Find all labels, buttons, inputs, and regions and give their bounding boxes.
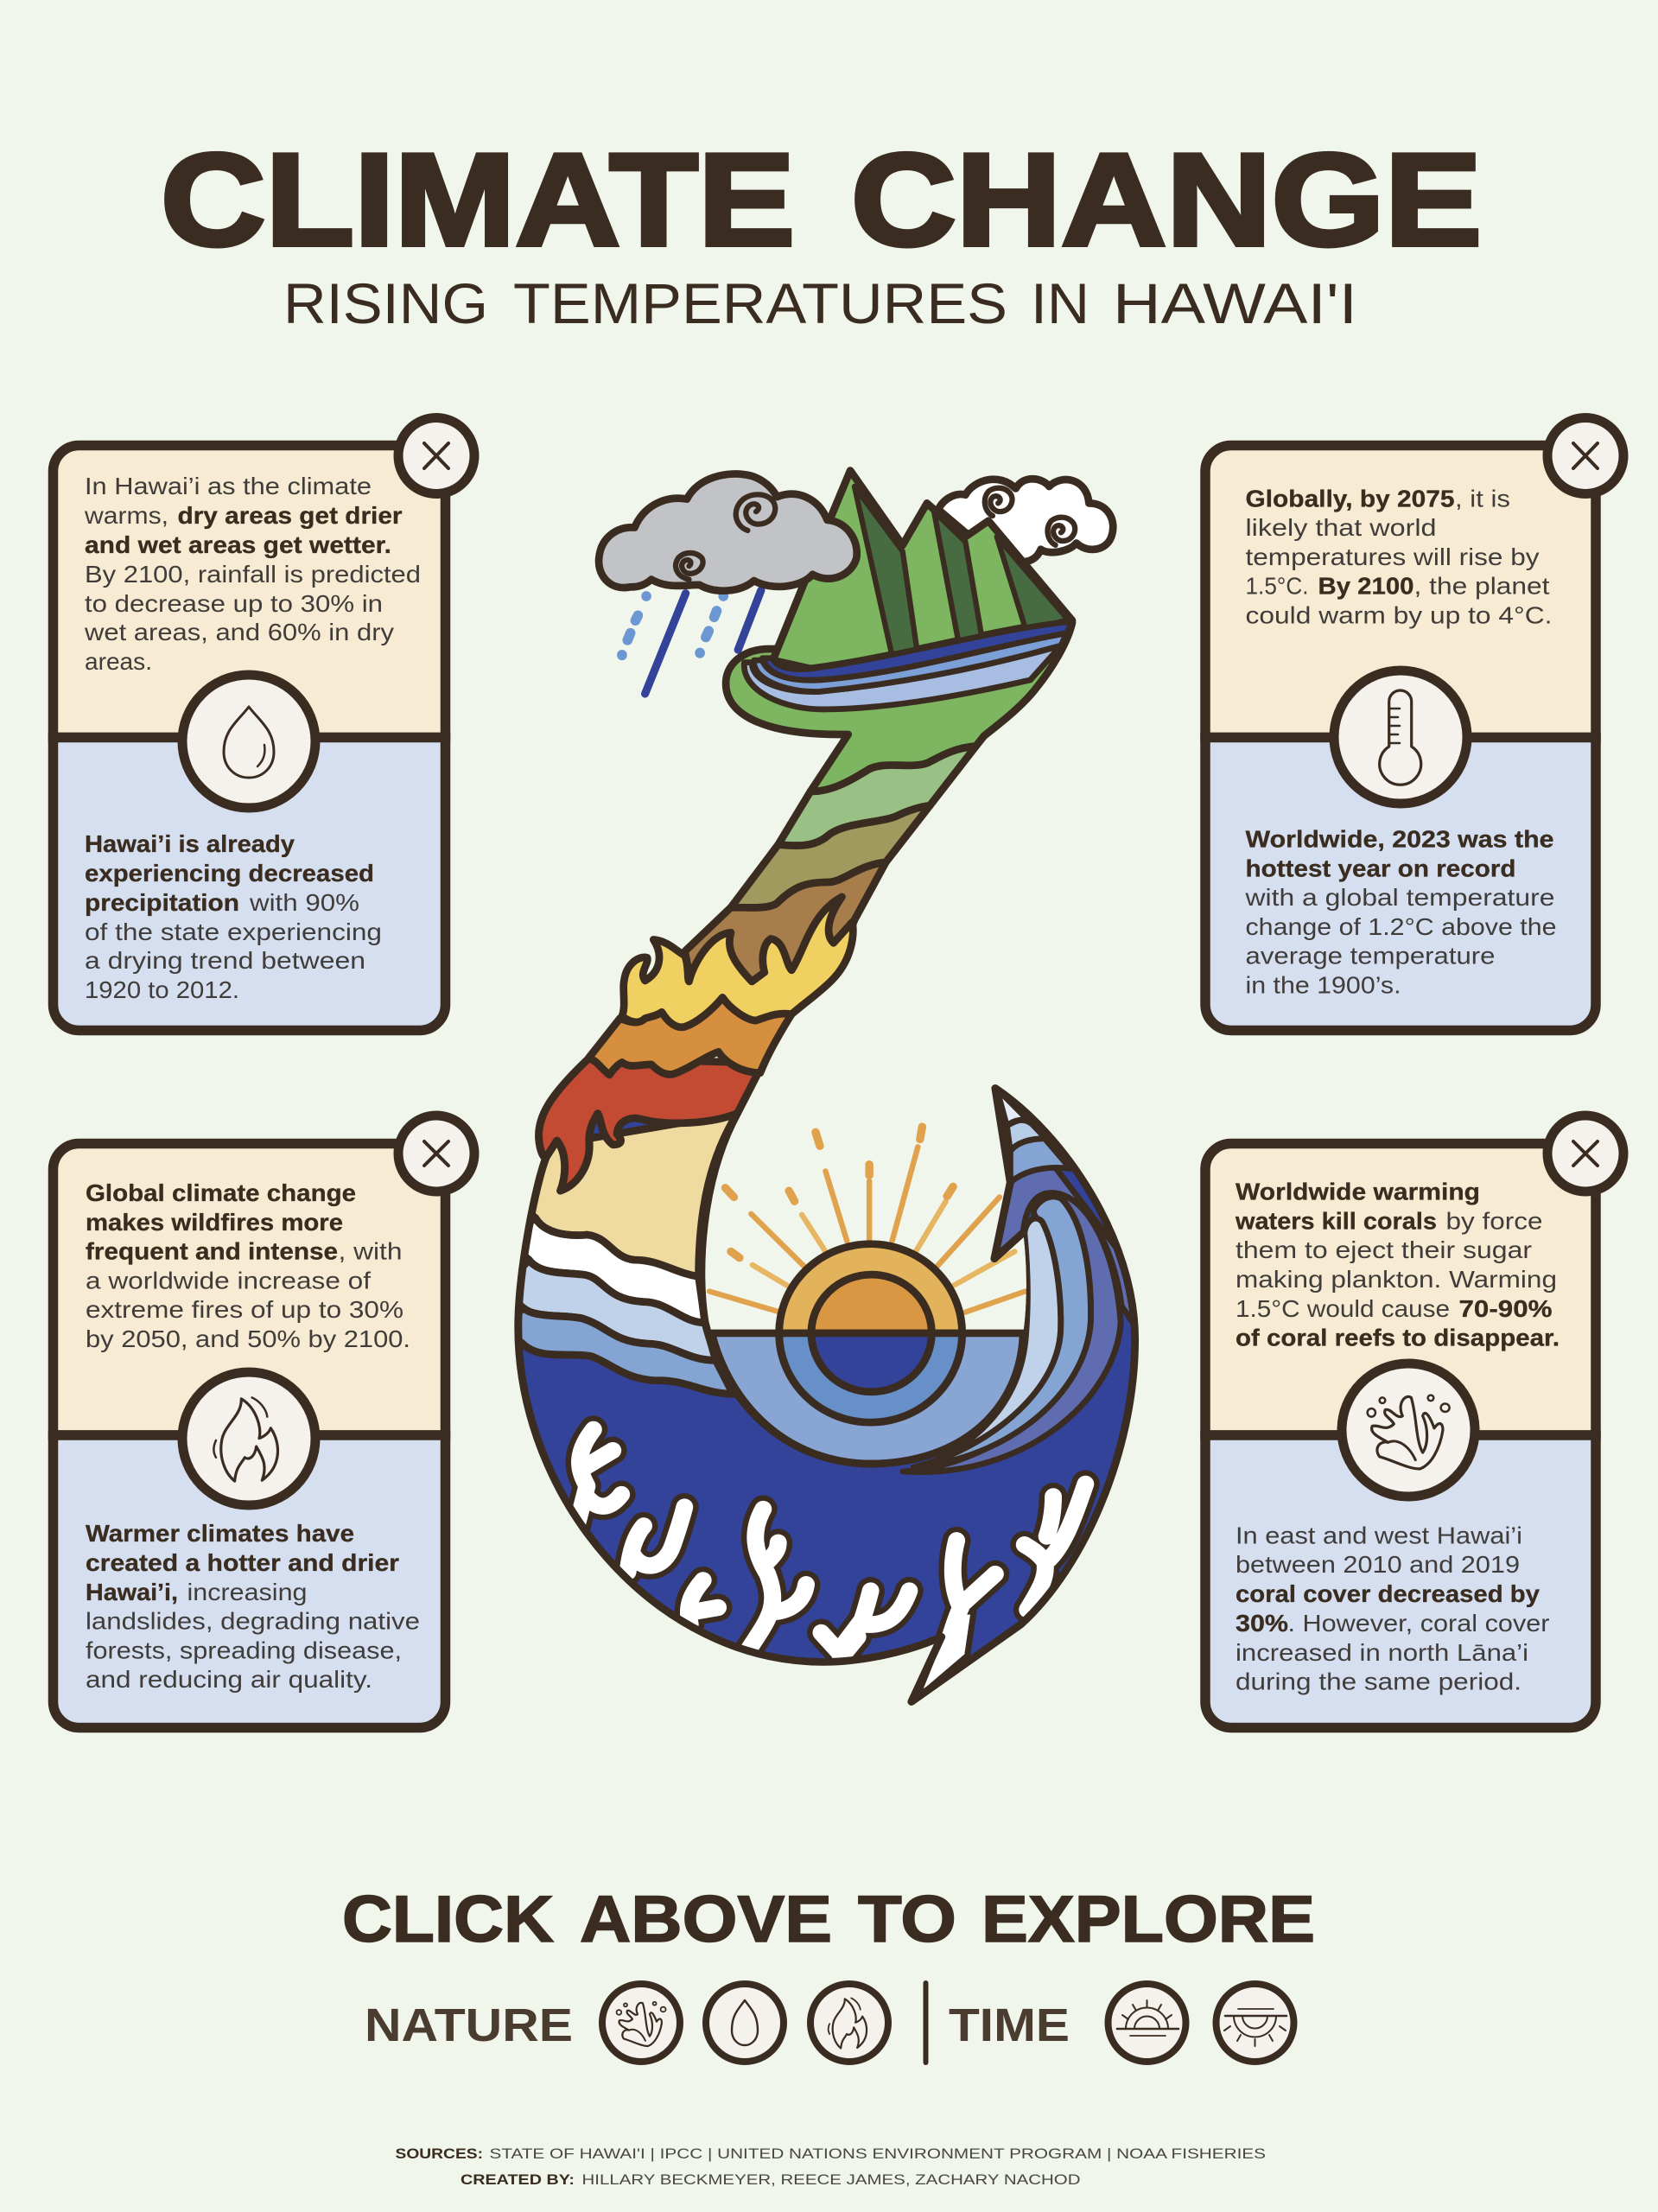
horizon water [712, 1333, 1025, 1464]
precipitation trend text: experiencing decreased [85, 860, 374, 887]
mountains [772, 471, 1072, 669]
icon: sunrise button [1108, 1984, 1185, 2062]
global warming forecast text: temperatures will rise by [1246, 543, 1540, 570]
white foam band [528, 1215, 701, 1319]
hotter drier Hawaii text: landslides, degrading native [86, 1607, 420, 1635]
coral cover decrease text [1236, 1522, 1550, 1695]
wildfire frequency text: makes wildfires more [86, 1209, 343, 1236]
green land [726, 623, 1072, 791]
hotter drier Hawaii text: Hawai’i, [86, 1579, 178, 1605]
rainfall prediction text: and wet areas get wetter. [85, 531, 391, 558]
panel: temperature card [1205, 418, 1623, 1030]
panel: wildfire card [54, 1116, 474, 1728]
coral bleaching text: making plankton. Warming [1236, 1266, 1557, 1293]
red flame band [539, 1058, 763, 1191]
hook outline [518, 1088, 1135, 1701]
icon: thermometer [1334, 671, 1467, 804]
light water band [523, 1256, 712, 1357]
hotter drier Hawaii text: forests, spreading disease, [86, 1637, 402, 1664]
global warming forecast text: , it is [1455, 486, 1510, 512]
panel: rainfall card [54, 418, 474, 1030]
precipitation trend text [85, 830, 382, 1003]
rain [622, 590, 761, 694]
mid water band [501, 1308, 733, 1394]
coral bleaching text: of coral reefs to disappear. [1236, 1324, 1560, 1351]
close button [398, 418, 474, 494]
hotter drier Hawaii text: created a hotter and drier [86, 1549, 399, 1576]
hotter drier Hawaii text: Warmer climates have [86, 1520, 354, 1547]
hottest year text: with a global temperature [1244, 884, 1555, 911]
coral bleaching text: them to eject their sugar [1236, 1236, 1532, 1263]
coral bleaching text: Worldwide warming [1236, 1179, 1480, 1205]
coral cover decrease text: In east and west Hawai’i [1236, 1522, 1522, 1548]
close button [1547, 1116, 1623, 1192]
precipitation trend text: with 90% [249, 889, 359, 916]
global warming forecast text: 1.5°C. [1246, 572, 1308, 600]
orange flame band [588, 997, 791, 1075]
wildfire frequency text: extreme fires of up to 30% [86, 1296, 403, 1323]
rainfall prediction text: wet areas, and 60% in dry [84, 619, 394, 645]
credits line: HILLARY BECKMEYER, REECE JAMES, ZACHARY NACHOD [582, 2171, 1080, 2188]
subtitle: IN [1031, 271, 1089, 335]
rainfall prediction text: warms, [84, 502, 168, 529]
coral bleaching text [1235, 1179, 1560, 1351]
hook lower part: ocean, sun, wave and corals [501, 1058, 1141, 1701]
global warming forecast text: , the planet [1413, 572, 1550, 600]
sand band [536, 1120, 729, 1273]
hottest year text: hottest year on record [1246, 855, 1515, 881]
precipitation trend text: of the state experiencing [85, 918, 382, 945]
call to action heading: ABOVE [580, 1883, 832, 1956]
sun rays [709, 1127, 1026, 1313]
global warming forecast text: could warm by up to 4°C. [1246, 601, 1552, 629]
precipitation trend text: precipitation [85, 889, 239, 916]
coral cover decrease text: between 2010 and 2019 [1236, 1551, 1520, 1578]
nature label: NATURE [365, 1999, 573, 2051]
sun and reflection [779, 1244, 962, 1422]
wildfire frequency text: by 2050, and 50% by 2100. [86, 1325, 410, 1352]
coral cover decrease text: during the same period. [1236, 1668, 1521, 1695]
global warming forecast text: Globally, by 2075 [1246, 486, 1455, 512]
precipitation trend text: a drying trend between [85, 947, 365, 974]
subtitle: TEMPERATURES [513, 271, 1007, 335]
call to action heading: CLICK [342, 1883, 554, 1956]
call to action heading [342, 1883, 1315, 1956]
wave head [1001, 1170, 1130, 1325]
wildfire frequency text [86, 1179, 410, 1352]
coral bleaching text: by force [1446, 1208, 1543, 1234]
soil layers [778, 747, 976, 846]
subtitle [283, 271, 1357, 335]
rainfall prediction text: areas. [85, 648, 152, 675]
coral cover decrease text: increased in north Lāna’i [1236, 1639, 1528, 1666]
hottest year text: average temperature [1246, 942, 1495, 969]
coral cover decrease text: coral cover decreased by [1236, 1580, 1540, 1607]
credits line: CREATED BY: [461, 2171, 575, 2188]
rainfall prediction text [84, 473, 421, 675]
ocean body [518, 1058, 1135, 1701]
coral bleaching text: 1.5°C would cause [1236, 1295, 1450, 1322]
title: CLIMATE [161, 126, 795, 273]
coral bleaching text: waters kill corals [1235, 1208, 1437, 1234]
rainfall prediction text: to decrease up to 30% in [85, 590, 383, 617]
icon: coral button [602, 1984, 680, 2062]
icon: sunset button [1217, 1984, 1294, 2062]
icon: flame [182, 1372, 315, 1505]
corals [576, 1429, 1085, 1700]
title: CHANGE [851, 126, 1482, 273]
call to action heading: TO [858, 1883, 956, 1956]
hook upper part: shank, mountains and clouds [588, 471, 1113, 1075]
yellow flame [622, 897, 853, 1027]
coral bleaching text: 70-90% [1458, 1295, 1553, 1322]
hotter drier Hawaii text: and reducing air quality. [86, 1666, 372, 1693]
global warming forecast text: likely that world [1246, 514, 1436, 541]
wildfire frequency text: a worldwide increase of [86, 1267, 371, 1294]
rainfall prediction text: By 2100, rainfall is predicted [85, 561, 421, 588]
panel: coral card [1205, 1116, 1623, 1728]
call to action heading: EXPLORE [981, 1883, 1315, 1956]
hotter drier Hawaii text [86, 1520, 420, 1693]
rainfall prediction text: dry areas get drier [178, 502, 403, 529]
close button [398, 1116, 474, 1192]
icon: water drop button [706, 1984, 784, 2062]
icon: flame button [810, 1984, 888, 2062]
coral cover decrease text: . However, coral cover [1287, 1610, 1550, 1637]
global warming forecast text [1246, 486, 1552, 629]
hottest year text: change of 1.2°C above the [1246, 913, 1557, 940]
rainfall prediction text: In Hawai’i as the climate [85, 473, 372, 499]
sources line: STATE OF HAWAI'I | IPCC | UNITED NATIONS ENVIRONMENT PROGRAM | NOAA FISHERIES [489, 2145, 1266, 2162]
global warming forecast text: By 2100 [1318, 572, 1413, 600]
fish hook illustration [501, 471, 1141, 1701]
subtitle: HAWAI'I [1113, 271, 1357, 335]
precipitation trend text: Hawai’i is already [85, 830, 295, 857]
wildfire frequency text: frequent and intense [86, 1237, 338, 1265]
wildfire frequency text: , with [339, 1237, 403, 1265]
white cloud [938, 479, 1113, 562]
hotter drier Hawaii text: increasing [187, 1579, 308, 1605]
sources line: SOURCES: [396, 2145, 483, 2162]
coral cover decrease text: 30% [1236, 1610, 1288, 1637]
time label: TIME [949, 1999, 1070, 2051]
wildfire frequency text: Global climate change [86, 1179, 356, 1206]
title [161, 126, 1482, 273]
hottest year text: Worldwide, 2023 was the [1246, 826, 1553, 852]
credits line [461, 2171, 1080, 2188]
close button [1547, 418, 1623, 494]
icon: water drop [182, 675, 315, 808]
hottest year text [1244, 826, 1557, 999]
subtitle: RISING [283, 271, 488, 335]
icon: coral [1342, 1363, 1475, 1497]
water stripes [744, 621, 1072, 709]
wave curl bands [903, 1193, 1121, 1472]
grey cloud [599, 474, 857, 591]
divider between nature and time [923, 1980, 928, 2065]
precipitation trend text: 1920 to 2012. [85, 976, 239, 1003]
hottest year text: in the 1900’s. [1246, 971, 1401, 999]
